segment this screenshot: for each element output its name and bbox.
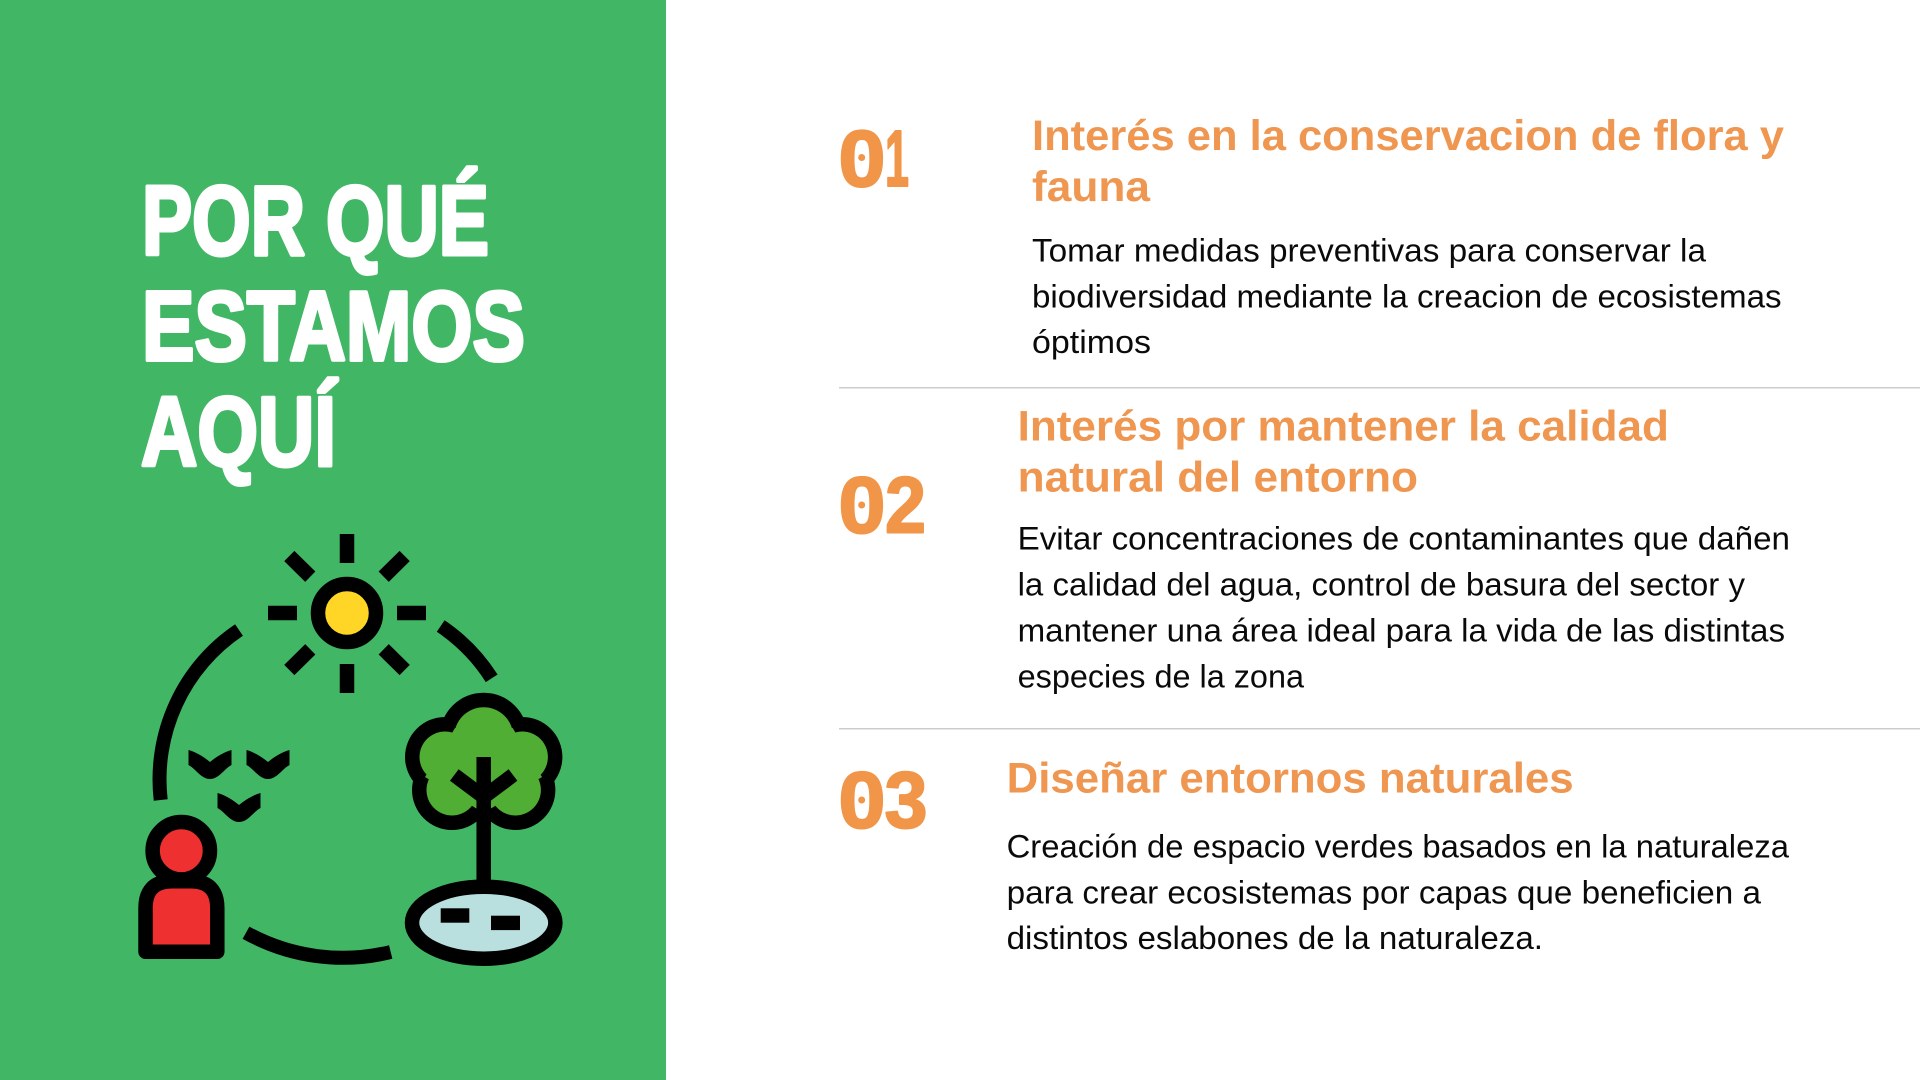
number 01: 1 <box>885 114 909 203</box>
number 02: 2 <box>885 460 926 550</box>
icon: person <box>146 822 217 952</box>
body text 1: óptimos <box>1032 324 1151 360</box>
body text 2: Evitar concentraciones de contaminantes que dañen <box>1018 520 1790 556</box>
body text 1 <box>1032 232 1782 360</box>
body text 2: la calidad del agua, control de basura del sector y <box>1018 567 1746 603</box>
number 03: 0 <box>838 756 886 844</box>
body text 3 <box>1007 828 1790 956</box>
heading 2 <box>1018 402 1669 502</box>
icon: sun <box>268 534 426 693</box>
title: AQUÍ <box>141 376 338 486</box>
heading 2: natural del entorno <box>1018 454 1418 502</box>
heading 1: fauna <box>1032 163 1151 211</box>
body text 3: Creación de espacio verdes basados en la naturaleza <box>1007 828 1790 864</box>
body text 2 <box>1018 520 1790 694</box>
section 3 <box>838 754 1790 956</box>
icon: pond <box>412 887 555 959</box>
title <box>141 166 525 486</box>
number 03 <box>838 756 928 844</box>
tree crown fill <box>420 707 548 816</box>
number 02: 0 <box>838 460 886 550</box>
heading 1 <box>1032 112 1784 211</box>
body text 3: para crear ecosistemas por capas que beneficien a <box>1007 874 1762 910</box>
icon: birds <box>188 750 290 822</box>
number 02 <box>838 460 926 550</box>
number 01 <box>838 114 909 203</box>
body text 1: Tomar medidas preventivas para conservar la <box>1032 232 1707 268</box>
body text 2: especies de la zona <box>1018 658 1305 694</box>
section 1 <box>838 112 1784 360</box>
heading 2: Interés por mantener la calidad <box>1018 402 1669 450</box>
icon: tree <box>405 693 562 890</box>
title: POR QUÉ <box>142 166 489 276</box>
heading 3: Diseñar entornos naturales <box>1007 754 1574 802</box>
heading 1: Interés en la conservacion de flora y <box>1032 112 1784 160</box>
number 01: 0 <box>838 114 886 203</box>
title: ESTAMOS <box>142 271 525 381</box>
tree crown outline <box>405 693 562 830</box>
body text 3: distintos eslabones de la naturaleza. <box>1007 920 1543 956</box>
icon: nature cycle <box>146 534 562 959</box>
panel: green sidebar <box>0 0 666 1080</box>
body text 2: mantener una área ideal para la vida de las distintas <box>1018 612 1785 648</box>
number 03: 3 <box>884 756 928 844</box>
section 2 <box>838 402 1790 694</box>
tree trunk and branches <box>454 757 513 890</box>
body text 1: biodiversidad mediante la creacion de ecosistemas <box>1032 278 1782 314</box>
cycle arcs <box>160 626 492 958</box>
